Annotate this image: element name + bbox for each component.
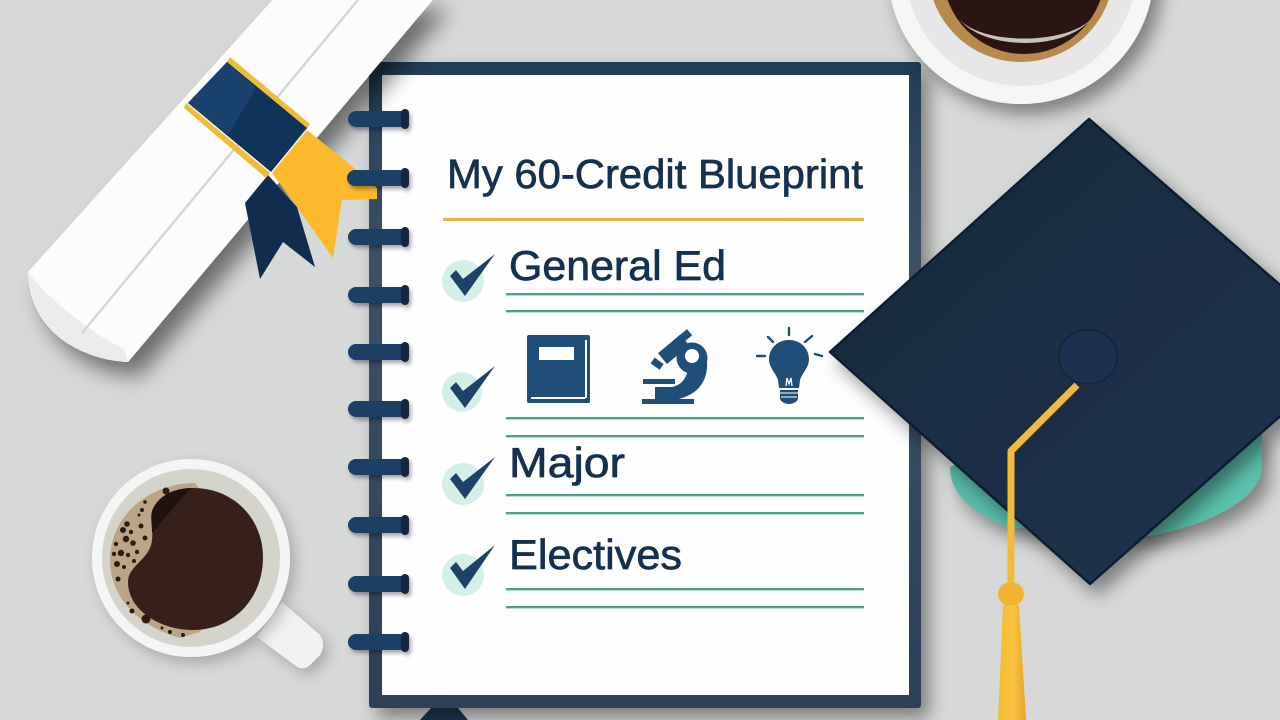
ring	[348, 632, 409, 652]
ring	[348, 457, 409, 477]
ribbon tail: navy	[245, 175, 315, 279]
coffee surface	[128, 488, 263, 630]
coffee cup: lower left	[92, 459, 323, 668]
diploma scroll	[28, 0, 437, 362]
tassel knot	[998, 582, 1024, 606]
notebook tab at bottom	[420, 708, 468, 720]
icon: book	[527, 335, 590, 403]
cup inner wall	[102, 469, 280, 647]
cup inner	[906, 0, 1136, 86]
checklist item: Electives	[442, 531, 864, 608]
ring	[348, 342, 409, 362]
notebook frame	[369, 62, 921, 708]
writing lines	[506, 588, 864, 608]
icon: light bulb	[757, 328, 822, 404]
coffee surface	[943, 0, 1105, 54]
check icon	[442, 545, 495, 596]
writing lines	[506, 293, 864, 312]
ring	[347, 168, 409, 188]
icon: microscope	[642, 329, 708, 404]
panel: notebook	[369, 62, 921, 708]
writing lines	[506, 417, 864, 437]
scroll fold	[82, 0, 362, 333]
cap board	[830, 119, 1280, 584]
label: Major	[509, 439, 625, 486]
checklist item: Major	[442, 439, 864, 514]
scroll body	[28, 0, 437, 362]
checklist item: subject icons	[442, 328, 864, 437]
graduation cap	[830, 119, 1280, 720]
ring	[348, 399, 409, 419]
ring	[348, 574, 409, 594]
checklist item: General Ed	[442, 242, 864, 312]
notebook paper	[382, 75, 909, 695]
cup handle	[257, 602, 323, 668]
ribbon band	[184, 57, 310, 178]
check icon	[442, 366, 495, 412]
tassel	[998, 605, 1026, 720]
coffee foam	[110, 483, 240, 638]
ribbon tail: gold	[272, 130, 377, 258]
label: Electives	[509, 531, 682, 578]
ring	[348, 109, 409, 129]
foam bubbles	[112, 488, 185, 637]
cap button	[1059, 330, 1117, 384]
saucer	[888, 0, 1154, 104]
cup rim	[92, 459, 290, 657]
tassel cord	[1011, 385, 1077, 582]
coffee shade	[151, 488, 193, 533]
coffee cup: top right	[888, 0, 1154, 104]
scroll end cap	[28, 272, 128, 362]
title underline	[443, 218, 864, 221]
label: General Ed	[509, 242, 726, 289]
notebook spiral rings	[347, 109, 409, 652]
check icon	[442, 254, 495, 302]
ring	[348, 285, 409, 305]
ring	[348, 515, 409, 535]
coffee highlight	[960, 18, 1092, 43]
writing lines	[506, 494, 864, 514]
cap underside: teal	[950, 400, 1262, 536]
coffee ring	[928, 0, 1114, 62]
title: My 60-Credit Blueprint	[447, 151, 864, 197]
ring	[348, 227, 409, 247]
check icon	[442, 457, 495, 505]
